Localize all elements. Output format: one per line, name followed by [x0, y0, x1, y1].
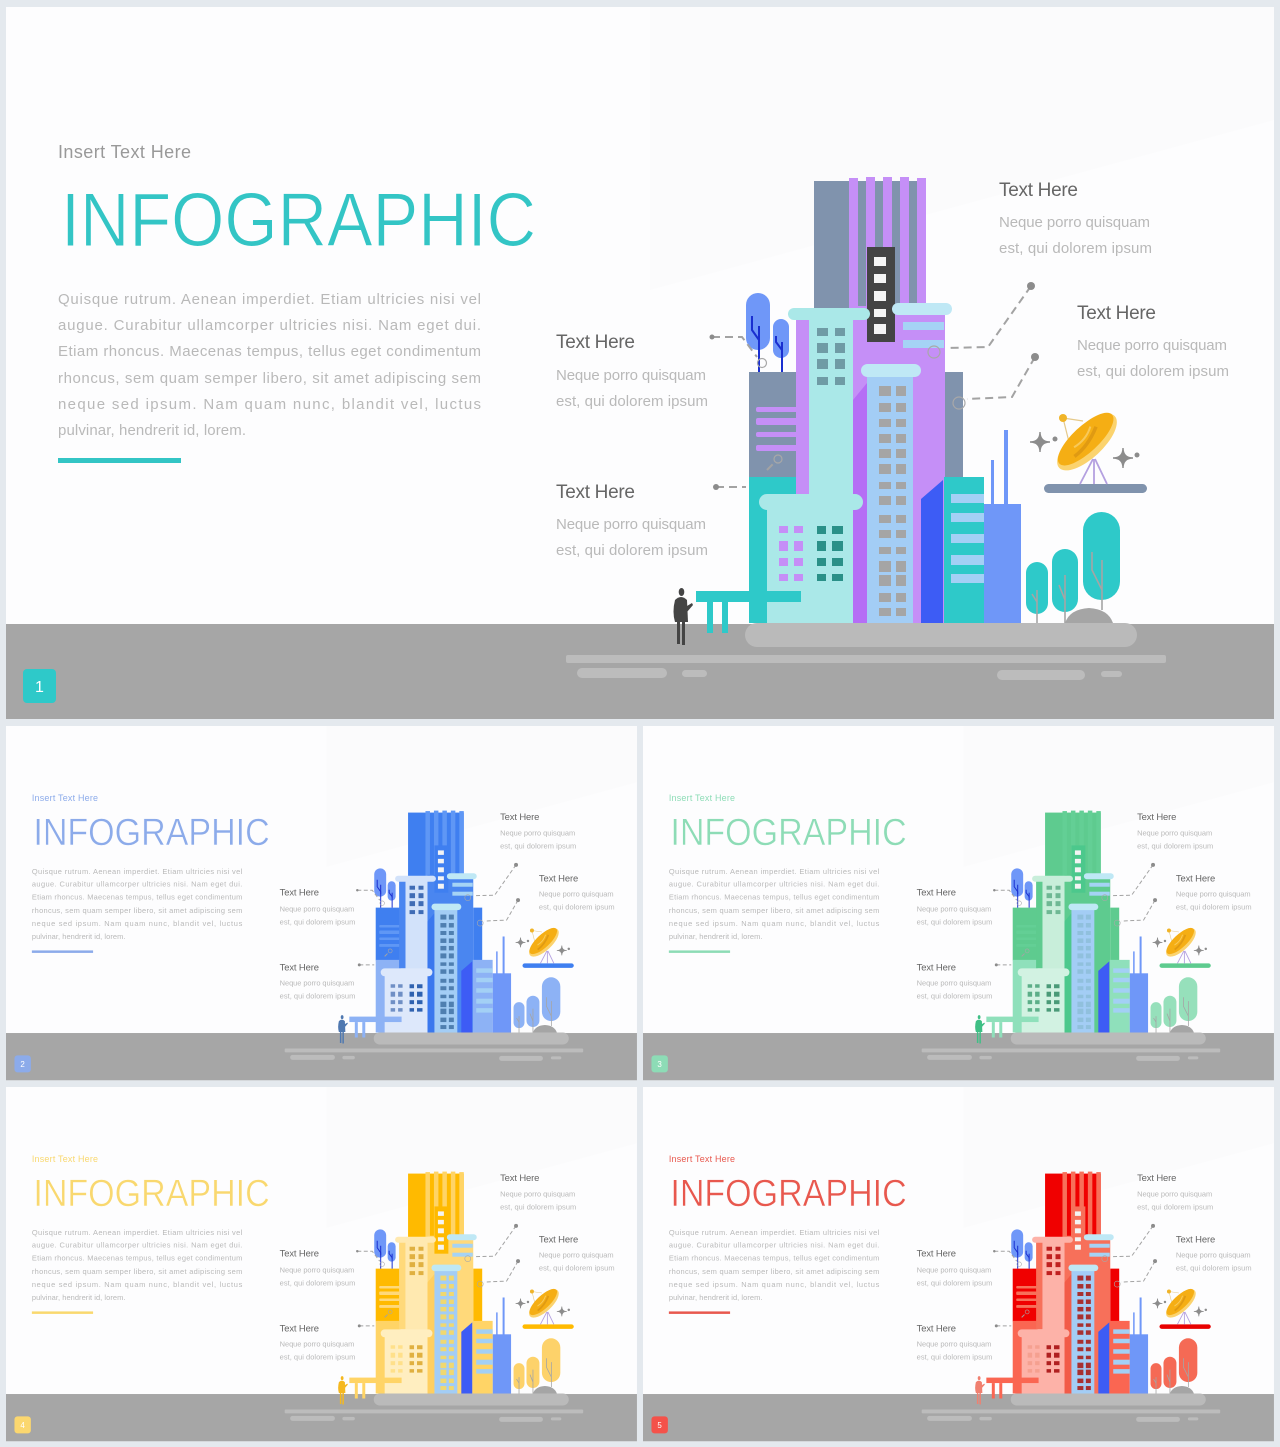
body paragraph: Quisque rutrum. Aenean imperdiet. Etiam ultricies nisi vel — [58, 291, 481, 308]
eyebrow text: Insert Text Here — [669, 793, 735, 803]
slide 4: yellow variant — [6, 1087, 637, 1441]
right low buildings and antennas — [921, 430, 1021, 623]
blue trees — [746, 293, 789, 372]
body paragraph: neque sed ipsum. Nam quam nunc, blandit vel, luctus — [32, 919, 243, 928]
text block: lower left: est, qui dolorem ipsum — [917, 992, 992, 1001]
body paragraph: rhoncus, sem quam semper libero, sit amet adipiscing sem — [669, 906, 879, 915]
text block: middle right: Text Here — [1176, 873, 1215, 884]
body paragraph: augue. Curabitur ullamcorper ultricies nisi. Nam eget dui. — [669, 880, 879, 889]
text block: top right — [1137, 1173, 1213, 1211]
text block: top right — [1137, 812, 1213, 850]
slide number badge — [14, 1416, 31, 1433]
ground strip — [6, 1033, 637, 1080]
slide background — [6, 7, 1274, 719]
text block: upper left: Text Here — [280, 888, 319, 899]
text block: lower left: est, qui dolorem ipsum — [917, 1353, 992, 1362]
front blue tower — [861, 364, 921, 623]
text block: top right — [500, 1173, 576, 1211]
text block: lower left: est, qui dolorem ipsum — [556, 542, 708, 559]
text block: top right: Text Here — [500, 1173, 539, 1184]
body paragraph: neque sed ipsum. Nam quam nunc, blandit vel, luctus — [669, 919, 880, 928]
title: INFOGRAPHIC — [670, 812, 907, 854]
text block: upper left: est, qui dolorem ipsum — [280, 1279, 355, 1288]
rooftop cap and stripes — [892, 303, 952, 348]
text block: middle right: Neque porro quisquam — [1176, 1251, 1251, 1260]
dark accent strip — [853, 383, 867, 623]
text block: top right — [999, 180, 1152, 257]
body paragraph: pulvinar, hendrerit id, lorem. — [669, 1293, 762, 1302]
text block: lower left — [280, 962, 355, 1001]
text block: middle right: Neque porro quisquam — [1176, 890, 1251, 899]
city illustration — [285, 811, 583, 1061]
slide 1: teal main slide — [6, 7, 1274, 719]
front aqua building — [759, 494, 863, 623]
body paragraph: neque sed ipsum. Nam quam nunc, blandit vel, luctus — [58, 396, 481, 413]
body paragraph — [669, 1228, 880, 1302]
body paragraph: rhoncus, sem quam semper libero, sit amet adipiscing sem — [32, 906, 242, 915]
text block: upper left: Neque porro quisquam — [280, 905, 354, 914]
slide 3: green variant — [643, 726, 1274, 1080]
body paragraph: Quisque rutrum. Aenean imperdiet. Etiam ultricies nisi vel — [669, 1228, 880, 1237]
body paragraph: Etiam rhoncus. Maecenas tempus, tellus eget condimentum — [32, 1254, 242, 1263]
text block: upper left — [917, 888, 992, 927]
text block: lower left: Text Here — [280, 962, 319, 973]
text block: upper left: est, qui dolorem ipsum — [280, 918, 355, 927]
text block: middle right — [1176, 1234, 1252, 1273]
eyebrow text: Insert Text Here — [669, 1154, 735, 1164]
sparkles — [1030, 432, 1140, 468]
slide number badge — [651, 1055, 668, 1072]
text block: top right: est, qui dolorem ipsum — [1137, 841, 1213, 850]
text block: lower left: Text Here — [917, 1323, 956, 1334]
text block: upper left: Neque porro quisquam — [917, 1266, 991, 1275]
text block: lower left — [556, 482, 708, 559]
dark window block — [867, 247, 895, 342]
city illustration — [285, 1172, 583, 1422]
text block: middle right: est, qui dolorem ipsum — [1077, 363, 1229, 380]
body paragraph: augue. Curabitur ullamcorper ultricies nisi. Nam eget dui. — [32, 880, 242, 889]
text block: top right: Text Here — [1137, 812, 1176, 823]
body paragraph: pulvinar, hendrerit id, lorem. — [32, 932, 125, 941]
slide background — [6, 1087, 637, 1441]
accent underline — [669, 1311, 730, 1314]
eyebrow text: Insert Text Here — [32, 793, 98, 803]
text block: upper left: Neque porro quisquam — [280, 1266, 354, 1275]
platform — [745, 623, 1137, 647]
text block: middle right: est, qui dolorem ipsum — [539, 1264, 615, 1273]
title: INFOGRAPHIC — [33, 1173, 270, 1215]
text block: upper left: Text Here — [556, 332, 635, 353]
text block: top right: Neque porro quisquam — [500, 1189, 575, 1198]
text block: middle right: Text Here — [1077, 303, 1156, 324]
text block: lower left: est, qui dolorem ipsum — [280, 1353, 355, 1362]
callout nodes — [710, 282, 1039, 490]
text block: lower left: Neque porro quisquam — [917, 979, 991, 988]
text block: upper left: est, qui dolorem ipsum — [917, 1279, 992, 1288]
text block: upper left — [280, 1249, 355, 1288]
body paragraph: Quisque rutrum. Aenean imperdiet. Etiam ultricies nisi vel — [669, 867, 880, 876]
side building left with vents — [749, 372, 799, 623]
text block: top right: est, qui dolorem ipsum — [999, 240, 1152, 257]
body paragraph — [32, 867, 243, 941]
slide number badge: 4 — [20, 1421, 25, 1430]
bench canopy — [696, 591, 801, 633]
city illustration — [566, 177, 1166, 680]
body paragraph: Etiam rhoncus. Maecenas tempus, tellus eget condimentum — [669, 1254, 879, 1263]
title: INFOGRAPHIC — [61, 178, 536, 263]
text block: middle right: est, qui dolorem ipsum — [1176, 903, 1252, 912]
body paragraph: augue. Curabitur ullamcorper ultricies nisi. Nam eget dui. — [58, 317, 481, 334]
body paragraph — [32, 1228, 243, 1302]
ground strip — [6, 624, 1274, 719]
text block: middle right — [1077, 303, 1229, 380]
callout leader lines — [712, 286, 1035, 487]
text block: middle right: Text Here — [539, 873, 578, 884]
slide number badge: 1 — [35, 679, 44, 696]
text block: lower left: Neque porro quisquam — [556, 516, 706, 533]
slide number badge: 3 — [657, 1060, 662, 1069]
text block: top right: Neque porro quisquam — [1137, 828, 1212, 837]
text block: top right: Text Here — [500, 812, 539, 823]
text block: middle right: Text Here — [539, 1234, 578, 1245]
text block: upper left: Text Here — [917, 1249, 956, 1260]
body paragraph: rhoncus, sem quam semper libero, sit amet adipiscing sem — [58, 370, 481, 387]
title: INFOGRAPHIC — [33, 812, 270, 854]
road markings — [566, 655, 1166, 680]
slide number badge — [651, 1416, 668, 1433]
text block: upper left: est, qui dolorem ipsum — [556, 393, 708, 410]
tall rear tower with stripes — [814, 177, 926, 311]
text block: lower left: Neque porro quisquam — [280, 979, 354, 988]
body paragraph: neque sed ipsum. Nam quam nunc, blandit vel, luctus — [669, 1280, 880, 1289]
slide 2: blue variant — [6, 726, 637, 1080]
slide background — [643, 726, 1274, 1080]
text block: upper left: est, qui dolorem ipsum — [917, 918, 992, 927]
text block: lower left: Text Here — [556, 482, 635, 503]
ground strip — [643, 1394, 1274, 1441]
main mid building — [853, 306, 945, 623]
text block: top right: Text Here — [999, 180, 1078, 201]
text block: top right: Neque porro quisquam — [999, 214, 1150, 231]
text block: top right: Text Here — [1137, 1173, 1176, 1184]
text block: middle right: Neque porro quisquam — [539, 890, 614, 899]
body paragraph: augue. Curabitur ullamcorper ultricies nisi. Nam eget dui. — [669, 1241, 879, 1250]
text block: lower left: Neque porro quisquam — [917, 1340, 991, 1349]
eyebrow text: Insert Text Here — [32, 1154, 98, 1164]
body paragraph: Etiam rhoncus. Maecenas tempus, tellus eget condimentum — [58, 343, 481, 360]
body paragraph: rhoncus, sem quam semper libero, sit amet adipiscing sem — [669, 1267, 879, 1276]
text block: upper left — [280, 888, 355, 927]
text block: top right — [500, 812, 576, 850]
slide background — [6, 726, 637, 1080]
body paragraph: Etiam rhoncus. Maecenas tempus, tellus eget condimentum — [669, 893, 879, 902]
text block: top right: est, qui dolorem ipsum — [500, 1202, 576, 1211]
accent underline — [32, 1311, 93, 1314]
accent underline — [58, 458, 181, 463]
aqua tower — [788, 308, 870, 499]
slide background — [643, 1087, 1274, 1441]
text block: upper left: Text Here — [917, 888, 956, 899]
text block: upper left — [917, 1249, 992, 1288]
body paragraph: pulvinar, hendrerit id, lorem. — [669, 932, 762, 941]
text block: middle right: Neque porro quisquam — [539, 1251, 614, 1260]
body paragraph: pulvinar, hendrerit id, lorem. — [32, 1293, 125, 1302]
text block: upper left: Text Here — [280, 1249, 319, 1260]
body paragraph: Etiam rhoncus. Maecenas tempus, tellus eget condimentum — [32, 893, 242, 902]
city illustration — [922, 811, 1220, 1061]
body paragraph: augue. Curabitur ullamcorper ultricies nisi. Nam eget dui. — [32, 1241, 242, 1250]
body paragraph: Quisque rutrum. Aenean imperdiet. Etiam ultricies nisi vel — [32, 1228, 243, 1237]
text block: lower left: est, qui dolorem ipsum — [280, 992, 355, 1001]
teal trees and mound — [1026, 512, 1120, 623]
text block: top right: est, qui dolorem ipsum — [500, 841, 576, 850]
text block: middle right: Neque porro quisquam — [1077, 337, 1227, 354]
text block: middle right: est, qui dolorem ipsum — [1176, 1264, 1252, 1273]
text block: lower left — [280, 1323, 355, 1362]
text block: lower left: Neque porro quisquam — [280, 1340, 354, 1349]
satellite dish — [1044, 404, 1147, 493]
slide number badge — [23, 669, 56, 703]
text block: top right: est, qui dolorem ipsum — [1137, 1202, 1213, 1211]
text block: lower left — [917, 962, 992, 1001]
text block: middle right: Text Here — [1176, 1234, 1215, 1245]
accent underline — [32, 950, 93, 953]
body paragraph: pulvinar, hendrerit id, lorem. — [58, 422, 246, 439]
text block: middle right: est, qui dolorem ipsum — [539, 903, 615, 912]
text block: lower left: Text Here — [917, 962, 956, 973]
eyebrow text: Insert Text Here — [58, 142, 191, 162]
text block: top right: Neque porro quisquam — [1137, 1189, 1212, 1198]
text block: upper left: Neque porro quisquam — [917, 905, 991, 914]
text block: upper left — [556, 332, 708, 410]
body paragraph: neque sed ipsum. Nam quam nunc, blandit vel, luctus — [32, 1280, 243, 1289]
text block: upper left: Neque porro quisquam — [556, 367, 706, 384]
text block: top right: Neque porro quisquam — [500, 828, 575, 837]
text block: lower left: Text Here — [280, 1323, 319, 1334]
slide number badge — [14, 1055, 31, 1072]
body paragraph: rhoncus, sem quam semper libero, sit amet adipiscing sem — [32, 1267, 242, 1276]
slide 5: red variant — [643, 1087, 1274, 1441]
side building right — [945, 372, 963, 482]
slide number badge: 5 — [657, 1421, 662, 1430]
accent underline — [669, 950, 730, 953]
text block: lower left — [917, 1323, 992, 1362]
person — [674, 588, 693, 645]
slide number badge: 2 — [20, 1060, 25, 1069]
title: INFOGRAPHIC — [670, 1173, 907, 1215]
body paragraph — [669, 867, 880, 941]
ground strip — [643, 1033, 1274, 1080]
city illustration — [922, 1172, 1220, 1422]
text block: middle right — [539, 873, 615, 912]
text block: middle right — [539, 1234, 615, 1273]
text block: middle right — [1176, 873, 1252, 912]
ground strip — [6, 1394, 637, 1441]
body paragraph — [58, 291, 481, 439]
body paragraph: Quisque rutrum. Aenean imperdiet. Etiam ultricies nisi vel — [32, 867, 243, 876]
